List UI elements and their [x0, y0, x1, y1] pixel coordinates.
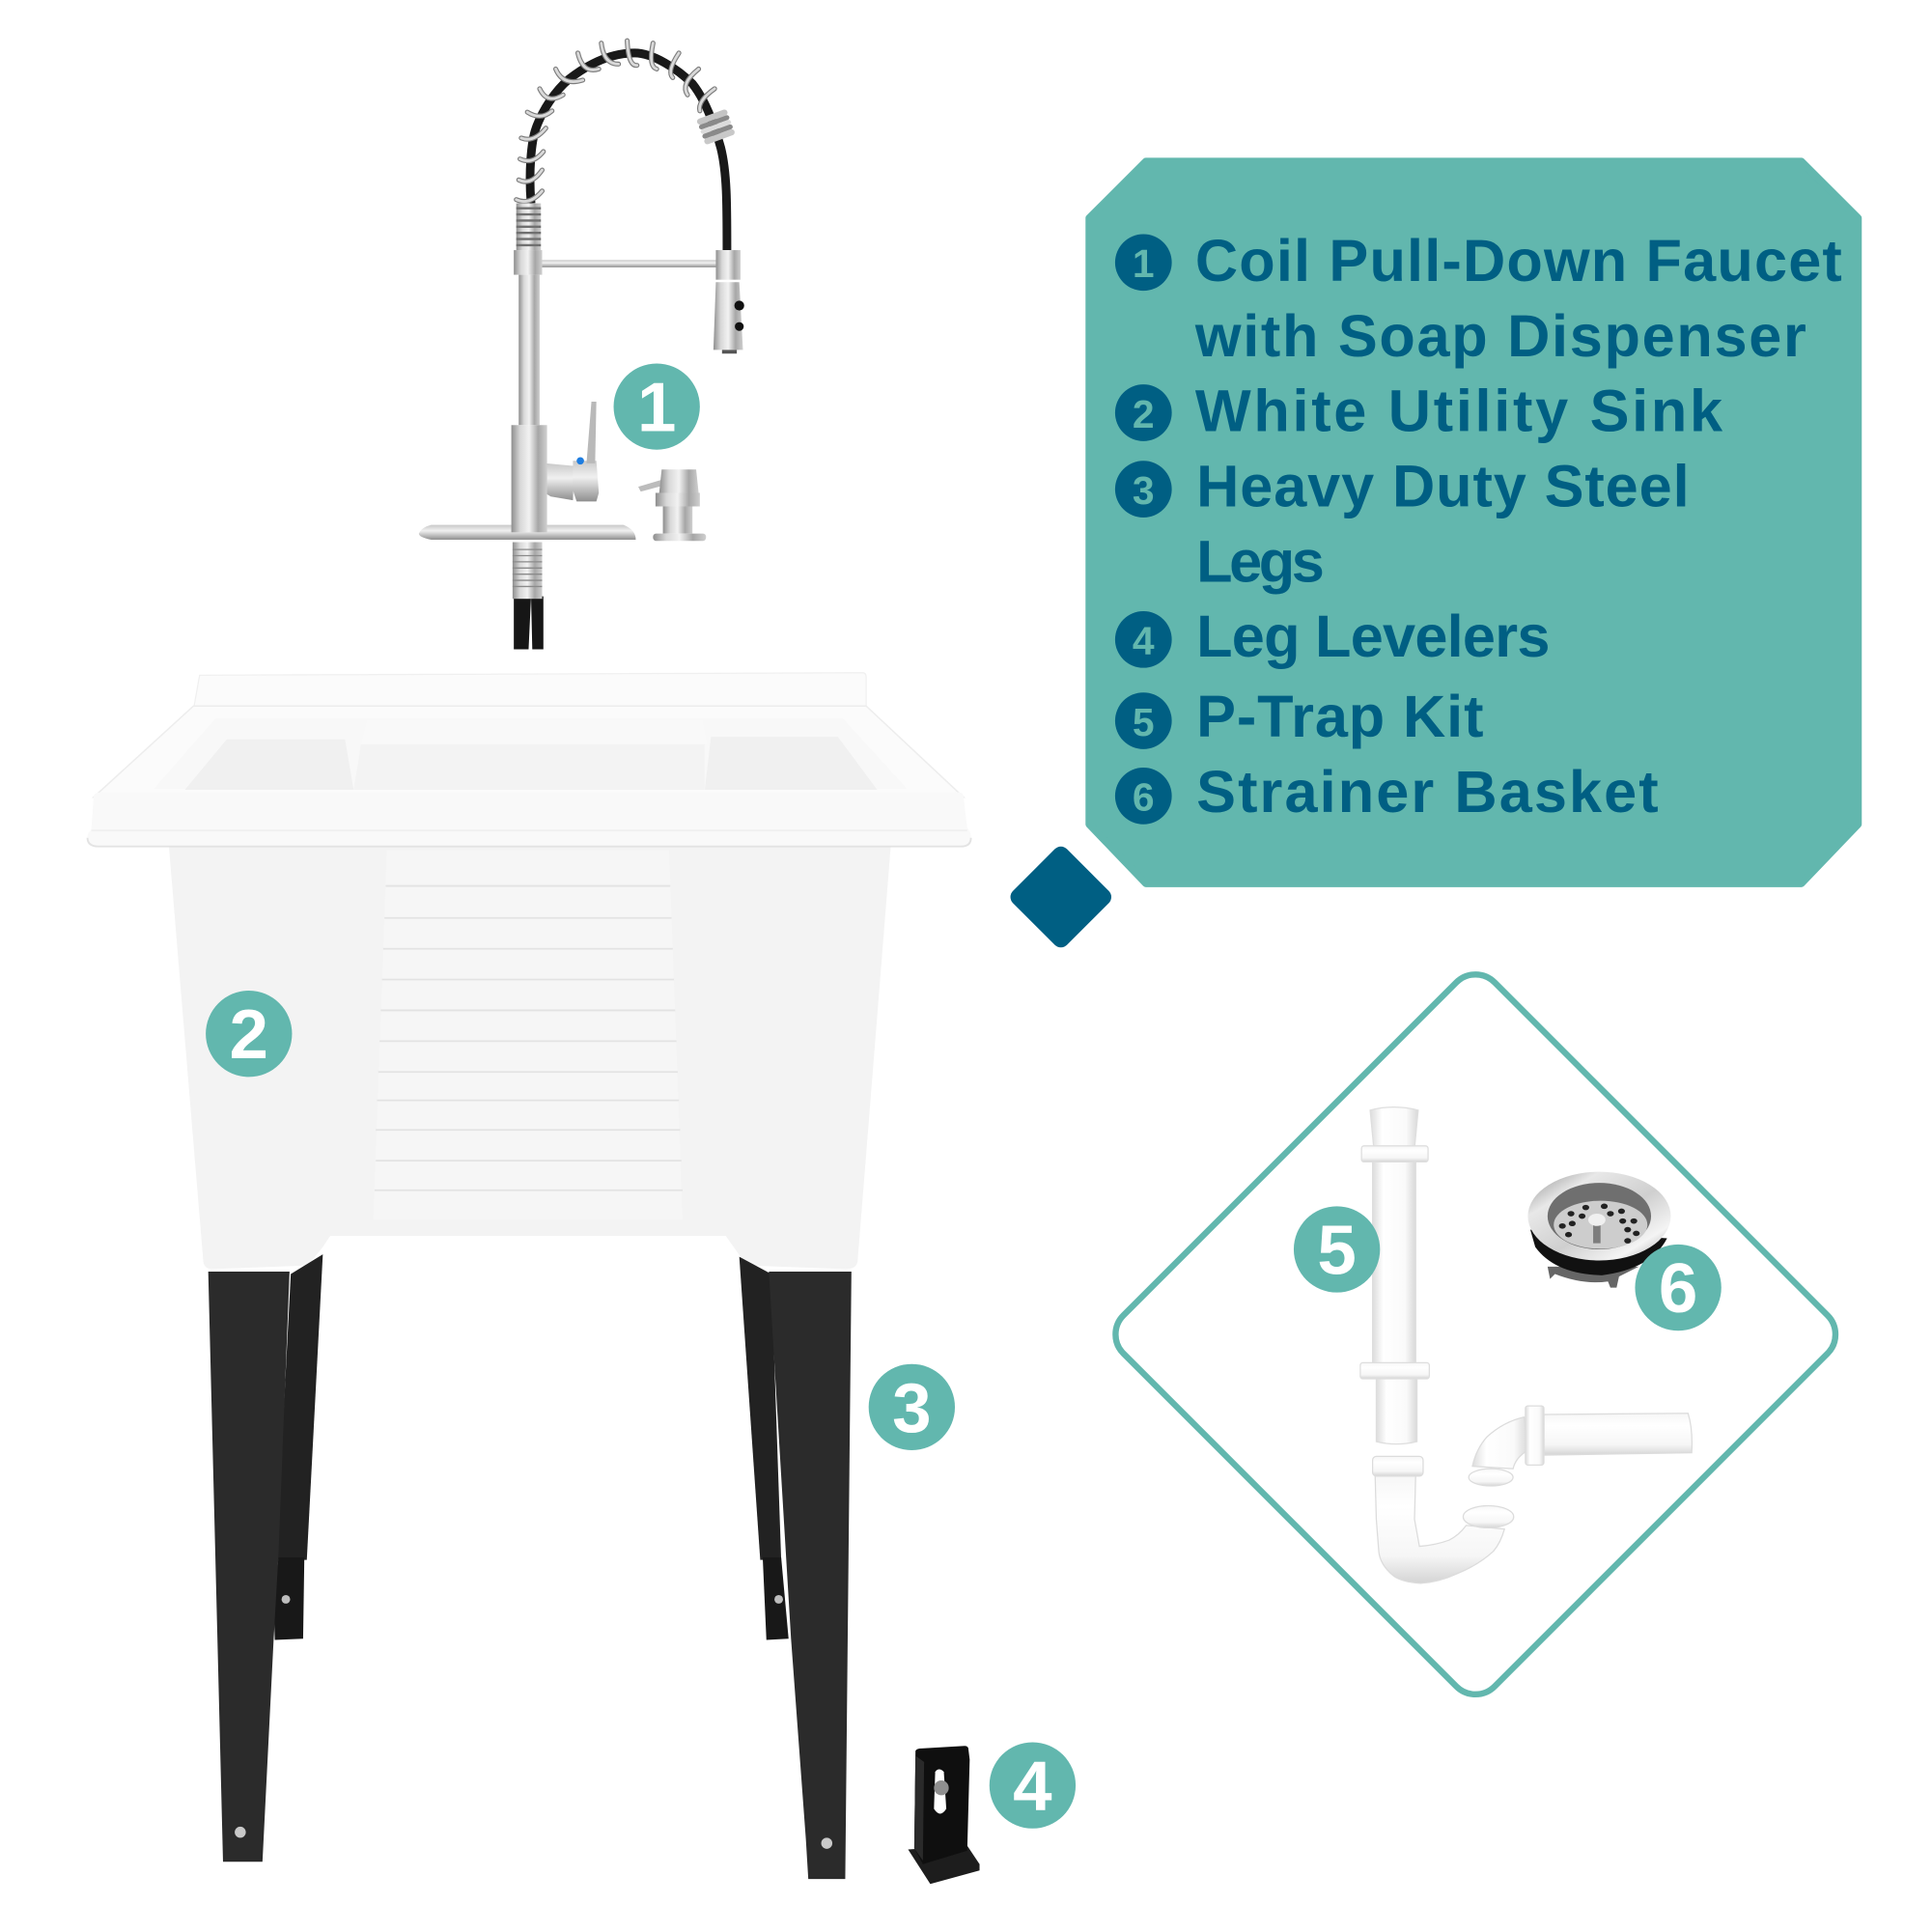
tailpiece tube [1360, 1107, 1429, 1444]
right basin well [705, 737, 878, 790]
item 1: with Soap Dispenser [1194, 303, 1806, 369]
item 5: 5 [1133, 700, 1155, 744]
handle housing [532, 402, 599, 501]
basin slope [154, 718, 907, 789]
riser tube [518, 275, 540, 425]
spring base [517, 204, 541, 250]
spout hose [530, 53, 727, 250]
number badge 6 [1635, 1245, 1722, 1330]
panel background [1089, 161, 1858, 883]
number badge 1 [614, 363, 700, 450]
faucet base cylinder [512, 425, 547, 532]
item 3: Legs [1196, 528, 1325, 594]
panel: parts list [1089, 161, 1858, 883]
hoses below deck [514, 597, 544, 650]
item 2: 2 [1133, 392, 1155, 436]
item 6: 6 [1133, 775, 1155, 820]
front face [769, 1272, 852, 1879]
sink body [169, 845, 891, 1269]
item 3 [1115, 453, 1690, 594]
basket post [1593, 1223, 1601, 1244]
spray head [714, 250, 744, 353]
j-bend [1373, 1456, 1514, 1583]
item 5: P-Trap Kit [1196, 684, 1483, 749]
upper collar [514, 250, 543, 275]
centre cap [1588, 1214, 1606, 1226]
number badge 5 [1294, 1206, 1380, 1293]
number badge 1: 1 [637, 369, 676, 447]
left steel leg [209, 1254, 322, 1862]
faucet with soap dispenser [419, 41, 744, 650]
swing arm [543, 260, 715, 267]
basket holes [1559, 1204, 1639, 1244]
flange [1527, 1172, 1670, 1260]
rear ledge [193, 673, 866, 710]
foot screw [235, 1827, 246, 1837]
number badge 3: 3 [892, 1369, 932, 1447]
rim top [94, 706, 964, 798]
threaded shank [513, 543, 543, 599]
number badge 4: 4 [1013, 1748, 1052, 1826]
dense coil wrap [696, 109, 736, 145]
black gasket [1530, 1230, 1667, 1275]
front face [209, 1272, 290, 1862]
bracket bolt [282, 1595, 291, 1604]
item 1: Coil Pull-Down Faucet [1195, 228, 1842, 294]
side panel [276, 1254, 322, 1560]
item 4: 4 [1133, 619, 1155, 663]
number badge 6: 6 [1659, 1249, 1697, 1328]
number badge 2 [206, 991, 292, 1077]
strainer basket [1527, 1172, 1670, 1288]
panel: diamond frame [1105, 964, 1847, 1705]
number badge 2: 2 [230, 995, 268, 1074]
bracket bolt [774, 1595, 783, 1604]
item 4: Leg Levelers [1196, 603, 1550, 669]
item 6: Strainer Basket [1196, 759, 1659, 825]
lower body [1548, 1267, 1638, 1288]
right steel leg [740, 1257, 852, 1879]
basket well [1548, 1183, 1651, 1249]
foot screw [822, 1837, 832, 1849]
item 1: 1 [1133, 241, 1155, 286]
number badge 5: 5 [1317, 1212, 1357, 1290]
upright side highlight [914, 1756, 924, 1861]
p-trap kit [1360, 1107, 1692, 1583]
item 3: 3 [1133, 468, 1155, 513]
coil turns [517, 41, 714, 202]
bracket [273, 1557, 304, 1640]
bolt [934, 1780, 949, 1795]
accent diamond [1007, 843, 1115, 951]
leg leveler [909, 1746, 980, 1884]
upright bracket [914, 1746, 969, 1864]
bracket [763, 1557, 789, 1640]
item 3: Heavy Duty Steel [1196, 453, 1690, 518]
item 1 [1115, 228, 1842, 369]
side panel [740, 1257, 781, 1560]
centre washboard panel [353, 744, 705, 790]
base plate [909, 1846, 980, 1884]
front rim [88, 793, 971, 847]
item 2: White Utility Sink [1195, 378, 1723, 444]
left basin well [184, 740, 353, 790]
adjustment slot [934, 1770, 946, 1813]
soap dispenser [638, 469, 706, 541]
washboard ribs [374, 851, 683, 1219]
deck plate [419, 525, 635, 540]
elbow and outlet tube [1469, 1406, 1692, 1486]
number badge 4 [990, 1742, 1076, 1829]
utility sink tub [88, 673, 971, 1269]
number badge 3 [869, 1364, 955, 1450]
